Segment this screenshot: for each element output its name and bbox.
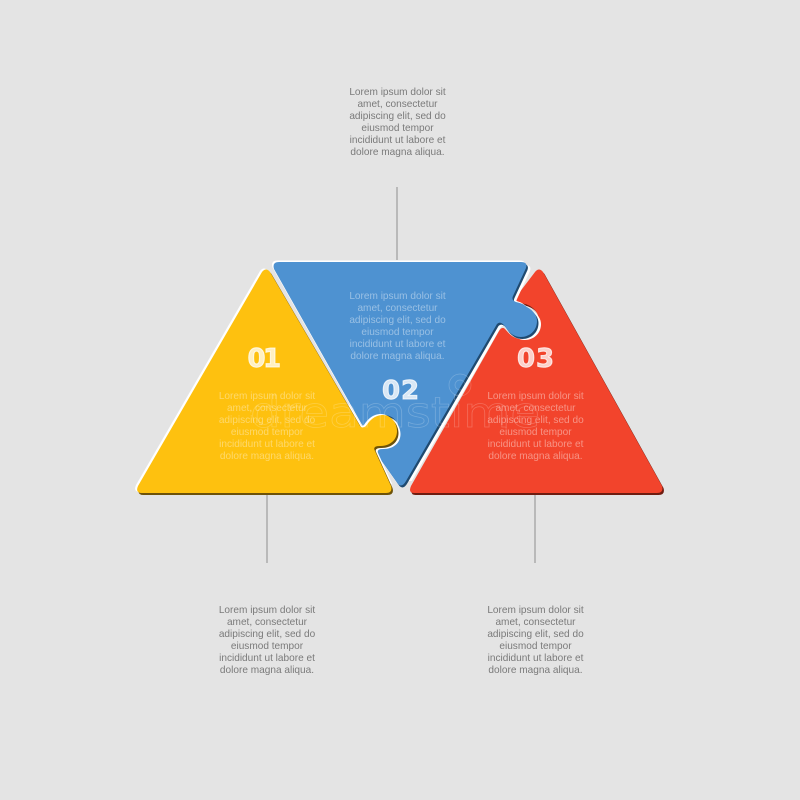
text block: bottom left: Lorem ipsum dolor sit (219, 605, 315, 616)
text block: bottom right: amet, consectetur (495, 617, 576, 628)
text block: top: Lorem ipsum dolor sit (349, 87, 446, 98)
text block: bottom right: eiusmod tempor (499, 641, 572, 652)
text block: bottom right: Lorem ipsum dolor sit (487, 605, 584, 616)
watermark: dreamstime (250, 388, 540, 437)
puzzle piece 03: red (410, 270, 664, 495)
text inside blue piece (349, 291, 446, 362)
text inside yellow piece (219, 391, 316, 462)
text inside blue piece: adipiscing elit, sed do (349, 315, 446, 326)
text block: bottom right: dolore magna aliqua. (488, 665, 583, 676)
number 02: 02 (382, 376, 419, 406)
text block: bottom left: incididunt ut labore et (219, 653, 315, 664)
text inside red piece: eiusmod tempor (499, 427, 572, 438)
text inside red piece: adipiscing elit, sed do (487, 415, 584, 426)
text inside yellow piece: adipiscing elit, sed do (219, 415, 316, 426)
text block: bottom right: incididunt ut labore et (488, 653, 584, 664)
text inside blue piece: Lorem ipsum dolor sit (349, 291, 446, 302)
connector line: bottom left (266, 495, 268, 563)
text inside blue piece: eiusmod tempor (361, 327, 434, 338)
text block: bottom left (219, 605, 316, 676)
text inside yellow piece: incididunt ut labore et (219, 439, 315, 450)
text block: top (349, 87, 446, 158)
text inside blue piece: dolore magna aliqua. (350, 351, 445, 362)
text block: top: eiusmod tempor (361, 123, 434, 134)
text inside red piece: amet, consectetur (495, 403, 576, 414)
number 01: 01 (247, 344, 281, 374)
text inside red piece: dolore magna aliqua. (488, 451, 583, 462)
puzzle piece 01: yellow (135, 268, 400, 496)
text inside red piece (487, 391, 584, 462)
number 03: 03 (517, 344, 554, 374)
text inside yellow piece: amet, consectetur (227, 403, 308, 414)
text block: top: adipiscing elit, sed do (349, 111, 446, 122)
text block: bottom left: eiusmod tempor (231, 641, 304, 652)
text block: bottom left: amet, consectetur (227, 617, 308, 628)
text block: bottom left: dolore magna aliqua. (220, 665, 314, 676)
text inside red piece: incididunt ut labore et (488, 439, 584, 450)
text inside yellow piece: eiusmod tempor (231, 427, 304, 438)
connector line: bottom right (534, 495, 536, 563)
text block: top: amet, consectetur (357, 99, 438, 110)
text inside yellow piece: dolore magna aliqua. (220, 451, 314, 462)
puzzle piece 02: blue (272, 260, 541, 488)
text inside yellow piece: Lorem ipsum dolor sit (219, 391, 315, 402)
connector line: top (396, 187, 398, 260)
watermark (250, 374, 540, 437)
text block: top: dolore magna aliqua. (350, 147, 445, 158)
text inside blue piece: incididunt ut labore et (350, 339, 446, 350)
text block: bottom right (487, 605, 584, 676)
text block: bottom right: adipiscing elit, sed do (487, 629, 584, 640)
text block: top: incididunt ut labore et (350, 135, 446, 146)
text inside blue piece: amet, consectetur (357, 303, 438, 314)
text block: bottom left: adipiscing elit, sed do (219, 629, 316, 640)
text inside red piece: Lorem ipsum dolor sit (487, 391, 584, 402)
